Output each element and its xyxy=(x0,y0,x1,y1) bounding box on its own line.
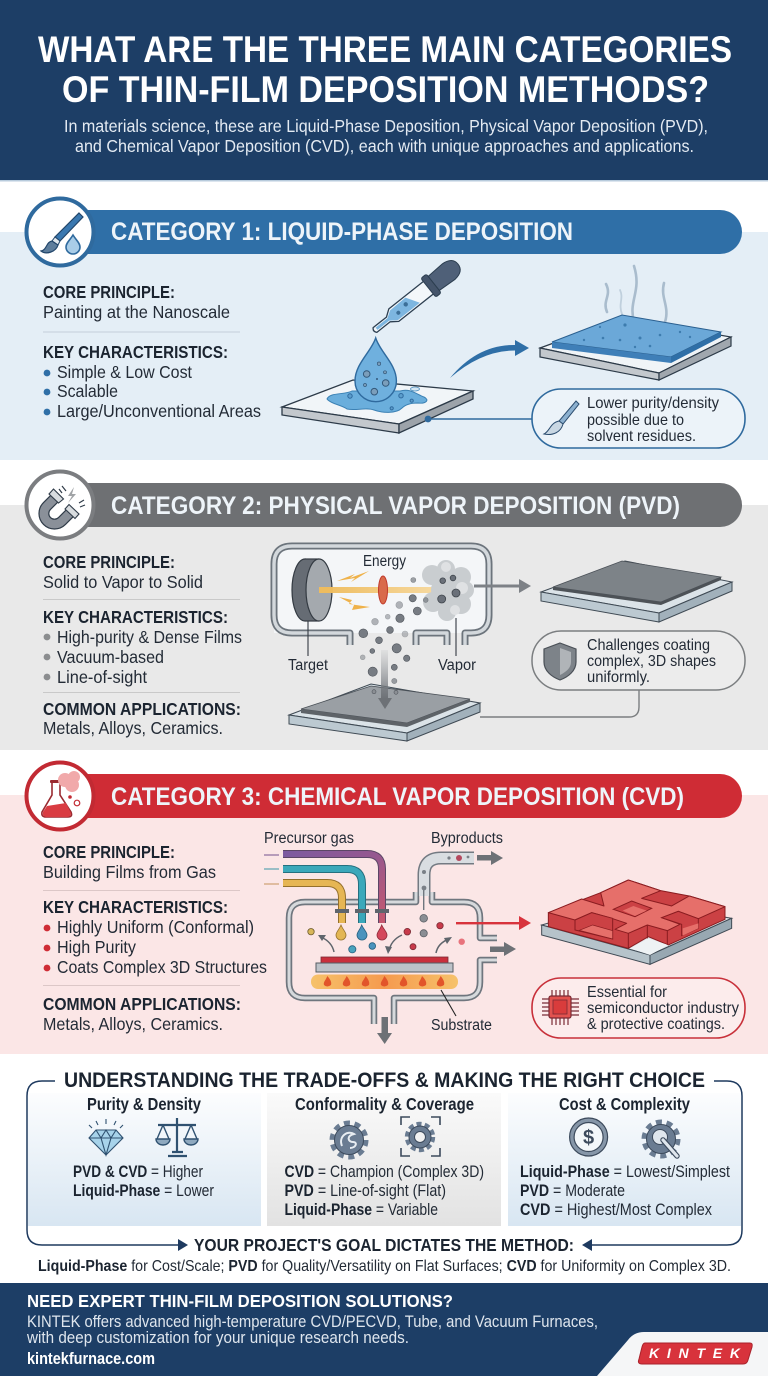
text: key characteristics: Large/Unconventional Areas xyxy=(57,401,261,421)
column: cost and complexity xyxy=(520,1094,730,1219)
text: core principle: CORE PRINCIPLE: xyxy=(43,552,175,572)
icon: dollar coin xyxy=(570,1118,608,1156)
text: common applications xyxy=(43,994,241,1034)
text: common applications: COMMON APPLICATIONS: xyxy=(43,699,241,719)
text: key characteristics: High-purity & Dense Films xyxy=(57,627,242,647)
banner: category 2: CATEGORY 2: PHYSICAL VAPOR DEPOSITION (PVD) xyxy=(111,492,680,520)
particles xyxy=(359,578,428,684)
column: cost and complexity: PVD = Moderate xyxy=(520,1181,625,1200)
icon: paintbrush and drop xyxy=(26,198,94,266)
column: cost and complexity: CVD = Highest/Most Complex xyxy=(520,1200,712,1219)
callout: solvent residues xyxy=(425,389,745,448)
arrow: chamber to plate xyxy=(474,579,531,593)
column: conformality and coverage: PVD = Line-of-sight (Flat) xyxy=(284,1181,446,1200)
precursor gas pipes xyxy=(264,854,389,923)
callout: solvent residues: possible due to xyxy=(587,412,684,429)
vapor cloud xyxy=(422,560,474,621)
labels: energy target vapor: Vapor xyxy=(438,657,476,674)
callout: semiconductor industry: semiconductor industry xyxy=(587,1000,739,1017)
text: key characteristics: Coats Complex 3D Structures xyxy=(57,957,267,977)
icon: flask xyxy=(26,762,94,830)
labels: energy target vapor: Target xyxy=(288,657,329,674)
footer URL: kintekfurnace.com xyxy=(27,1350,155,1368)
arrow: vapor down to substrate xyxy=(378,650,392,709)
trade-off frame xyxy=(27,1081,742,1245)
exhaust pipe: byproducts xyxy=(422,855,474,910)
text: core principle xyxy=(43,282,230,322)
text: core principle: Solid to Vapor to Solid xyxy=(43,572,203,592)
labels: gases and substrate: Byproducts xyxy=(431,830,503,847)
footer body xyxy=(26,1313,598,1347)
column: cost and complexity: Cost & Complexity xyxy=(559,1094,690,1114)
labels: gases and substrate: Substrate xyxy=(431,1017,492,1034)
trade-offs heading: UNDERSTANDING THE TRADE-OFFS & MAKING THE RIGHT CHOICE xyxy=(64,1069,705,1092)
text: core principle: CORE PRINCIPLE: xyxy=(43,842,175,862)
goal statement: YOUR PROJECT'S GOAL DICTATES THE METHOD: xyxy=(194,1235,574,1255)
subtitle: and Chemical Vapor Deposition (CVD), each with unique approaches and applications. xyxy=(75,136,694,156)
text: key characteristics: KEY CHARACTERISTICS: xyxy=(43,897,228,917)
arrow: exhaust down xyxy=(377,1017,392,1044)
panel: trade-offs xyxy=(27,1069,742,1275)
callout: semiconductor industry: & protective coatings. xyxy=(587,1016,725,1033)
callout: solvent residues: solvent residues. xyxy=(587,428,696,445)
column: conformality and coverage: Liquid-Phase = Variable xyxy=(284,1200,438,1219)
comparison column backgrounds xyxy=(28,1093,741,1226)
substrate plate bottom xyxy=(289,684,480,741)
text: key characteristics xyxy=(43,607,242,687)
arrow: byproducts out xyxy=(477,851,503,865)
callout: semiconductor industry: Essential for xyxy=(587,984,668,1001)
footer body: with deep customization for your unique research needs. xyxy=(26,1329,409,1347)
icon: diamond xyxy=(89,1119,123,1155)
column: purity and density: PVD & CVD = Higher xyxy=(73,1162,203,1181)
text: key characteristics: Highly Uniform (Conformal) xyxy=(57,917,254,937)
text: key characteristics: Vacuum-based xyxy=(57,647,164,667)
text: key characteristics xyxy=(43,897,267,977)
banner: category 3 xyxy=(60,774,742,818)
panel: category 2 PVD xyxy=(0,472,768,750)
summary line: Liquid-Phase for Cost/Scale; PVD for Quality/Versatility on Flat Surfaces; CVD for Uniformity on Complex 3D. xyxy=(38,1258,731,1275)
text: core principle xyxy=(43,842,216,882)
title xyxy=(38,29,732,110)
footer heading: NEED EXPERT THIN-FILM DEPOSITION SOLUTIONS? xyxy=(27,1291,453,1311)
reaction arrows xyxy=(318,935,452,954)
vacuum chamber xyxy=(274,546,489,645)
coated plate xyxy=(540,315,731,380)
labels: gases and substrate xyxy=(264,830,503,1034)
callout: semiconductor industry xyxy=(532,978,745,1038)
conformal 3D structure xyxy=(542,880,732,964)
text: key characteristics: Scalable xyxy=(57,381,118,401)
subtitle: In materials science, these are Liquid-Phase Deposition, Physical Vapor Deposition (PVD), xyxy=(64,116,708,136)
text: key characteristics: Simple & Low Cost xyxy=(57,362,192,382)
arrow: exhaust right xyxy=(490,942,516,956)
icon: complex gear xyxy=(332,1123,366,1157)
arrow: right into goal line xyxy=(582,1239,592,1251)
CVD chamber xyxy=(289,892,497,1024)
text: core principle: CORE PRINCIPLE: xyxy=(43,282,175,302)
callout: 3D coating challenge xyxy=(480,631,745,717)
panel: category 1 liquid-phase xyxy=(0,198,768,460)
arrow: chamber to conformal film xyxy=(456,916,531,930)
text: key characteristics xyxy=(43,342,261,421)
text: core principle xyxy=(43,552,203,592)
logo: KINTEK: KINTEK xyxy=(649,1345,741,1361)
vapor wisps xyxy=(606,266,666,322)
icon: magnet xyxy=(26,472,94,538)
arrow: to coated film xyxy=(450,340,529,378)
text: common applications: Metals, Alloys, Ceramics. xyxy=(43,718,223,738)
coated plate right xyxy=(541,561,732,622)
banner: category 1: CATEGORY 1: LIQUID-PHASE DEPOSITION xyxy=(111,218,573,246)
callout: 3D coating challenge: complex, 3D shapes xyxy=(587,653,716,670)
energy beam xyxy=(318,571,436,610)
text: common applications: Metals, Alloys, Ceramics. xyxy=(43,1014,223,1034)
footer band xyxy=(0,1283,768,1376)
substrate and heater xyxy=(311,957,458,989)
subtitle xyxy=(64,116,708,156)
labels: energy target vapor: Energy xyxy=(363,553,406,570)
column: purity and density: Purity & Density xyxy=(87,1094,201,1114)
title: OF THIN-FILM DEPOSITION METHODS? xyxy=(62,69,709,110)
icon: dropper xyxy=(366,255,466,340)
text: common applications: COMMON APPLICATIONS: xyxy=(43,994,241,1014)
text: key characteristics: KEY CHARACTERISTICS: xyxy=(43,607,228,627)
column: conformality and coverage: CVD = Champion (Complex 3D) xyxy=(284,1162,484,1181)
text: key characteristics: High Purity xyxy=(57,937,136,957)
banner: category 1 xyxy=(60,210,742,254)
callout: 3D coating challenge: uniformly. xyxy=(587,669,650,686)
labels: energy target vapor xyxy=(288,553,476,674)
banner: category 3: CATEGORY 3: CHEMICAL VAPOR DEPOSITION (CVD) xyxy=(111,783,684,811)
text: common applications xyxy=(43,699,241,738)
text: key characteristics: KEY CHARACTERISTICS: xyxy=(43,342,228,362)
logo: KINTEK xyxy=(597,1332,768,1376)
icon: balance scale xyxy=(156,1118,198,1156)
icon: gear in brackets xyxy=(401,1117,440,1156)
text: core principle: Painting at the Nanoscale xyxy=(43,302,230,322)
panel: category 3 CVD xyxy=(0,762,768,1054)
column: purity and density: Liquid-Phase = Lower xyxy=(73,1181,214,1200)
icon: gear with wrench xyxy=(644,1122,678,1156)
column: conformality and coverage xyxy=(284,1094,484,1219)
banner: category 2 xyxy=(60,483,742,527)
callout: solvent residues: Lower purity/density xyxy=(587,395,719,412)
text: key characteristics: Line-of-sight xyxy=(57,667,147,687)
icon: dollar coin: $ xyxy=(583,1127,594,1149)
column: purity and density xyxy=(73,1094,214,1200)
text: core principle: Building Films from Gas xyxy=(43,862,216,882)
column: conformality and coverage: Conformality & Coverage xyxy=(295,1094,474,1114)
footer body: KINTEK offers advanced high-temperature CVD/PECVD, Tube, and Vacuum Furnaces, xyxy=(27,1313,598,1331)
arrow: left into goal line xyxy=(178,1239,188,1251)
target disc xyxy=(292,559,333,621)
plate with droplet xyxy=(282,338,473,433)
callout: 3D coating challenge: Challenges coating xyxy=(587,637,710,654)
droplets and molecules xyxy=(308,914,465,953)
column: cost and complexity: Liquid-Phase = Lowest/Simplest xyxy=(520,1162,730,1181)
header band xyxy=(0,0,768,182)
labels: gases and substrate: Precursor gas xyxy=(264,830,354,847)
